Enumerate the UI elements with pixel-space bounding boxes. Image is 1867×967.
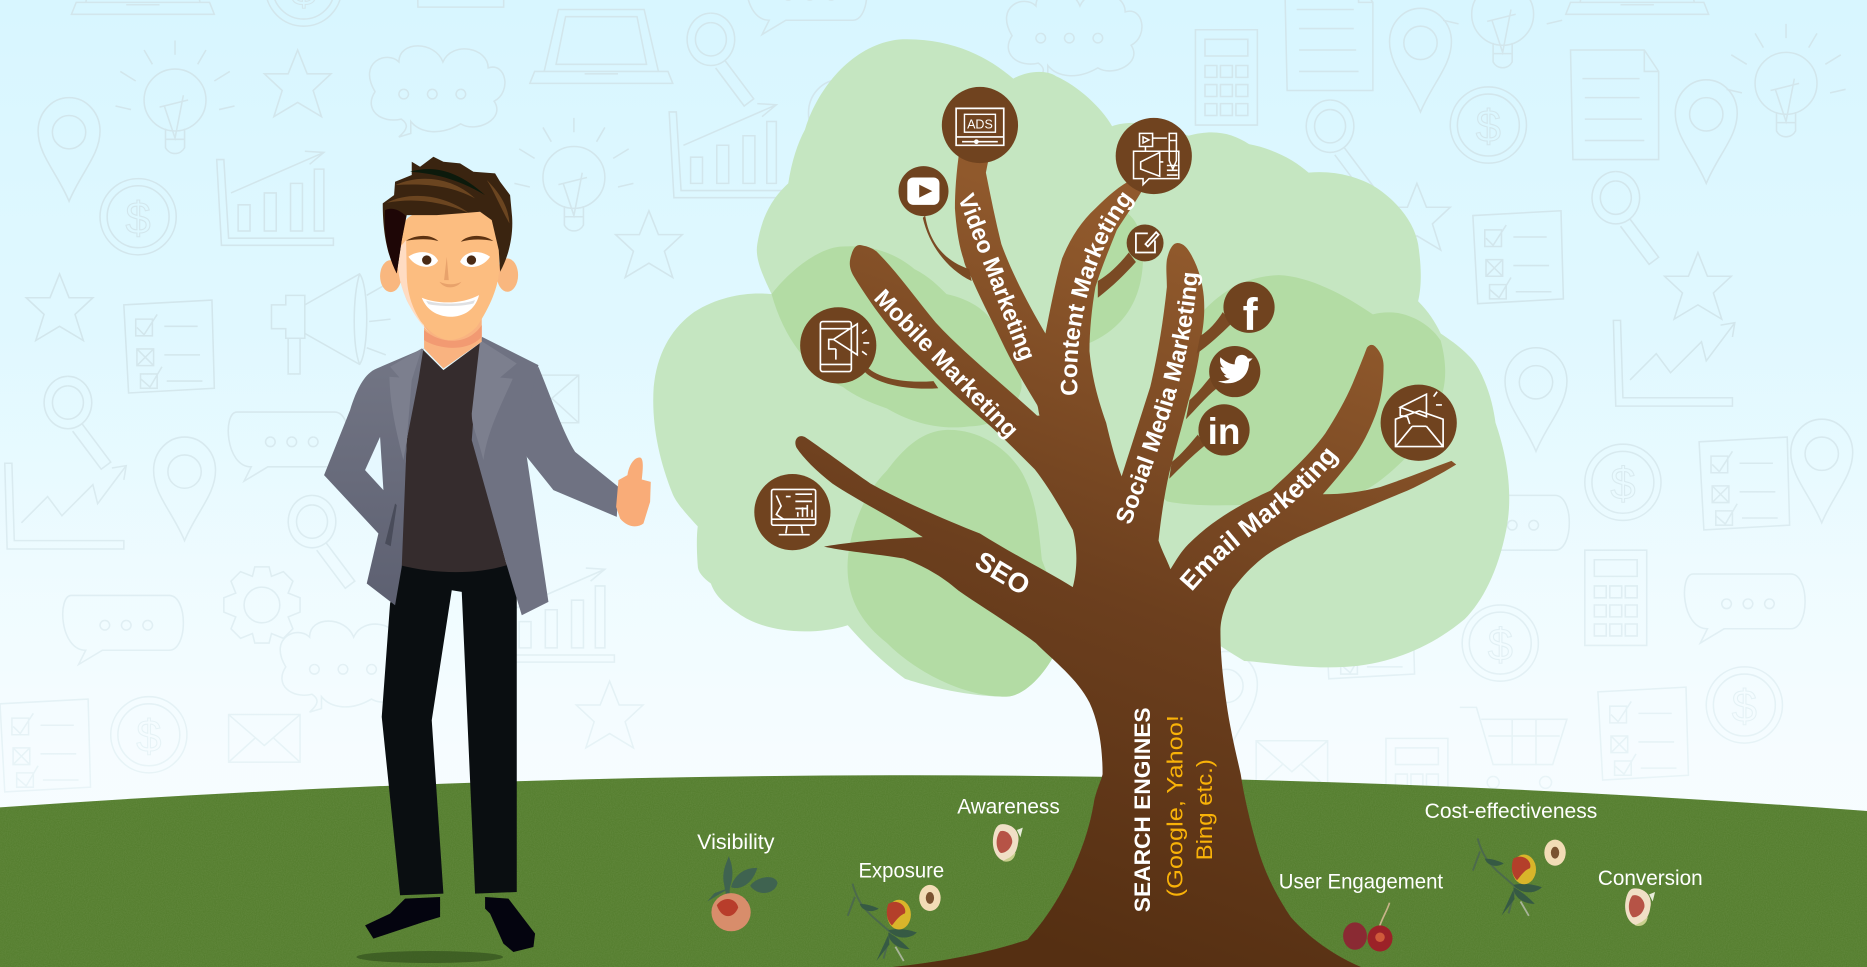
- icon: ads: ADS: [967, 118, 993, 132]
- branch label: Content Marketing: Content Marketing: [1060, 192, 1135, 395]
- branch label: Video Marketing: Video Marketing: [952, 190, 1041, 364]
- fruit: Exposure: [848, 860, 944, 961]
- jacket right panel: [472, 337, 548, 615]
- foliage shade: right: [1125, 275, 1445, 505]
- nose: [439, 257, 461, 287]
- fruit: Cost-effectiveness: [1425, 800, 1597, 916]
- foliage shade: lower left: [848, 430, 1101, 715]
- jacket back arm: [517, 367, 618, 517]
- tree foliage: [653, 39, 1509, 715]
- jacket left panel and sleeve: [324, 348, 423, 605]
- fruit: Exposure: Exposure: [858, 860, 944, 883]
- face: [397, 210, 499, 340]
- foliage shade: centre: [1089, 208, 1143, 343]
- ground: [0, 775, 1867, 967]
- brows: [406, 236, 493, 242]
- branch label: Email Marketing: Email Marketing: [1179, 448, 1340, 591]
- fruit: Cost-effectiveness: Cost-effectiveness: [1425, 800, 1597, 823]
- fruit: User Engagement: User Engagement: [1279, 870, 1443, 893]
- left shoe: [365, 897, 440, 939]
- branch label: SEO: SEO: [970, 545, 1035, 601]
- fruit: Visibility: [697, 831, 778, 931]
- trunk label: [1130, 707, 1217, 912]
- branch label: Social Media Marketing: Social Media Marketing: [1116, 272, 1202, 524]
- branch label: Mobile Marketing: Mobile Marketing: [869, 284, 1024, 444]
- small twigs: [864, 216, 1231, 479]
- trunk label: SEARCH ENGINES: [1130, 707, 1155, 912]
- fruit: Awareness: Awareness: [957, 795, 1060, 818]
- hand with thumb up: [616, 457, 651, 526]
- icon: facebook: f: [1243, 289, 1259, 340]
- character: businessman: [324, 157, 651, 963]
- tree trunk and branches: [795, 149, 1456, 967]
- fruit: Conversion: Conversion: [1598, 867, 1703, 890]
- trunk label: (Google, Yahoo!: [1162, 715, 1187, 897]
- neck: [424, 313, 482, 368]
- icon: ads: [942, 87, 1018, 163]
- fruit: User Engagement: [1279, 870, 1443, 952]
- icon: linkedin: [1198, 404, 1250, 456]
- smile: [422, 295, 479, 317]
- icon: linkedin: in: [1208, 411, 1240, 452]
- right shoe: [485, 897, 535, 952]
- fruit: Visibility: Visibility: [697, 831, 775, 854]
- icon: youtube: [898, 166, 949, 216]
- ground shadow: [356, 951, 503, 963]
- fruit: Awareness: [957, 795, 1060, 862]
- trousers: [382, 564, 517, 895]
- icon: facebook: [1223, 282, 1275, 340]
- foliage shade: left: [772, 246, 1022, 427]
- icon: seo: [754, 474, 831, 550]
- icon: email marketing: [1381, 385, 1457, 461]
- icon: content marketing: [1116, 118, 1192, 194]
- eyes: [408, 252, 490, 267]
- trunk label: Bing etc.): [1192, 759, 1217, 860]
- icon: edit: [1127, 224, 1164, 261]
- icon: twitter: [1209, 346, 1260, 397]
- ears: [380, 260, 401, 292]
- fruit: Conversion: [1598, 867, 1703, 926]
- icon: mobile marketing: [800, 307, 876, 383]
- t-shirt: [400, 342, 507, 572]
- hair: [383, 157, 512, 273]
